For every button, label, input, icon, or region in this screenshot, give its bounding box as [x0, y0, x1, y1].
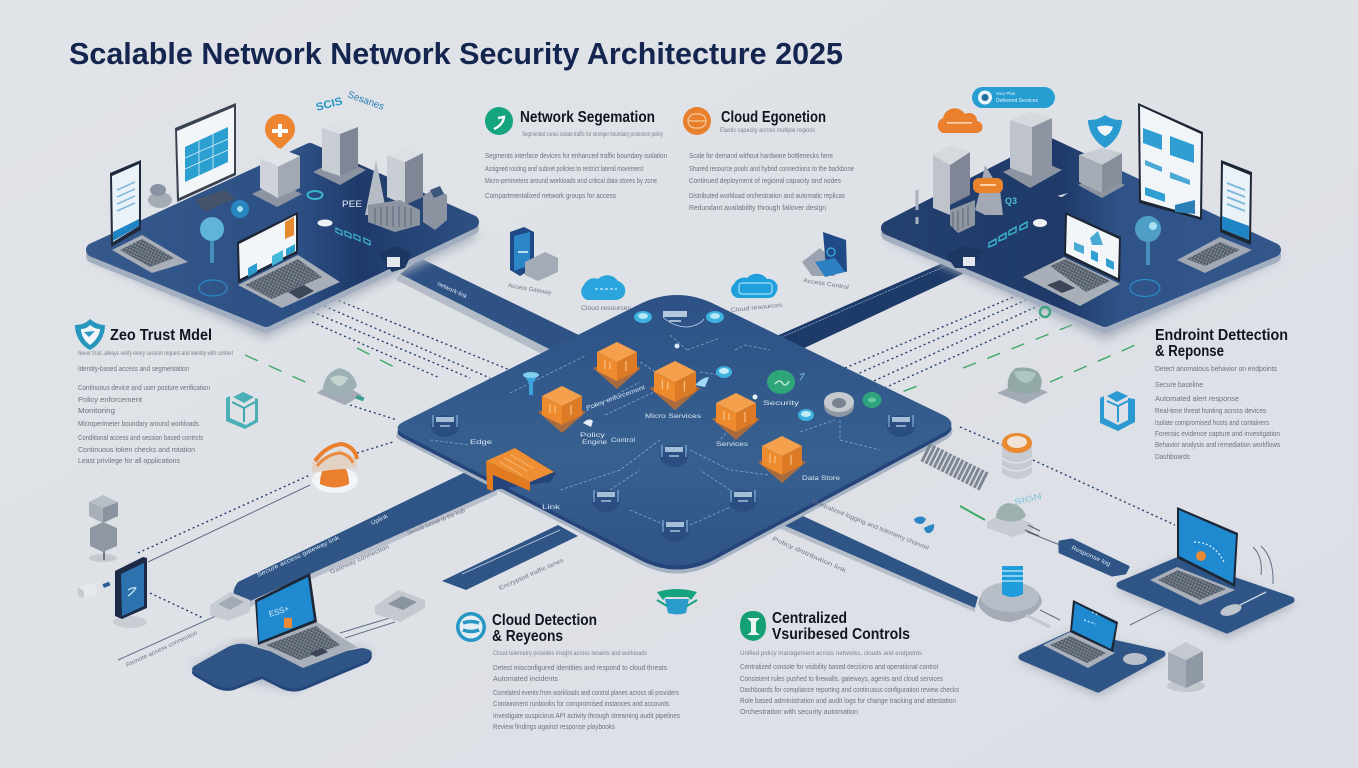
icon: dome device upper right — [997, 368, 1048, 404]
icon: grey cube server — [1167, 642, 1205, 692]
body: Dashboards — [1155, 452, 1190, 461]
laptop — [1150, 507, 1238, 605]
icon: orange shield house — [312, 444, 358, 493]
body: Redundant availability through failover design — [689, 203, 826, 212]
icon: green and blue tray — [657, 589, 697, 614]
icon: glowing drop — [1130, 216, 1161, 296]
body: Assigned routing and subnet policies to restrict lateral movement — [485, 164, 644, 173]
icon: orange cube 2 — [650, 361, 700, 410]
icon: small box — [78, 582, 110, 598]
connector hub — [945, 246, 985, 268]
panel: top-left platform — [90, 89, 480, 338]
labels: small node captions: Control — [611, 438, 635, 444]
icon: device right of centre: Access Control — [803, 278, 849, 291]
label text on connector bars: Uplink — [370, 513, 390, 527]
network links — [430, 317, 880, 525]
body: Shared resource pools and hybrid connections to the backbone — [689, 164, 854, 173]
icon: orange cylinder stack — [1002, 433, 1032, 479]
body: Forensic evidence capture and investigation — [1155, 429, 1280, 438]
icon: dome device lower right: SIGN — [1013, 491, 1043, 507]
body: Secure baseline — [1155, 380, 1203, 389]
body: Investigate suspicious API activity through streaming audit pipelines — [493, 711, 680, 720]
body: Dashboards for compliance reporting and continuous configuration review checks — [740, 685, 959, 694]
body: Unified policy management across networks, clouds and endpoints — [740, 650, 923, 657]
cloud badge — [938, 108, 983, 133]
body: Isolate compromised hosts and containers — [1155, 418, 1269, 427]
label: SCIS Sesanes: Sesanes — [346, 89, 385, 113]
body: Scale for demand without hardware bottlenecks here — [689, 151, 833, 160]
icon: orange cube 4 — [712, 393, 760, 440]
body: Role based administration and audit logs for change tracking and attestation — [740, 696, 956, 705]
body — [689, 127, 854, 212]
monitor — [175, 103, 236, 212]
icon: teal ring — [1040, 307, 1050, 317]
text block: centralized controls — [740, 610, 959, 716]
body: Conditional access and session based controls — [78, 433, 203, 442]
icon: wireless arcs — [1253, 546, 1273, 584]
icons: cyan nodes — [523, 311, 814, 427]
heading: Zeo Trust Mdel — [110, 327, 212, 344]
icon: shield — [75, 319, 105, 350]
icon: cloud right — [731, 274, 783, 314]
label: lower-right caption: Centralized logging and telemetry channel — [811, 499, 929, 552]
icon: pin — [265, 114, 295, 150]
icon: green rounded badge — [740, 611, 766, 641]
body: Containment runbooks for compromised instances and accounts — [493, 699, 669, 708]
tablet — [1138, 103, 1203, 220]
heading: Centralized — [772, 610, 847, 627]
server: middle — [313, 120, 366, 185]
body: Real-time threat hunting across devices — [1155, 406, 1266, 415]
label: lower-right caption 2: Policy distribution link — [771, 536, 848, 575]
heading line 2: & Reponse — [1155, 343, 1224, 360]
heading line 2: Vsuribesed Controls — [772, 626, 910, 643]
body: Correlated events from workloads and control planes across all providers — [493, 688, 679, 697]
icon: blue logo mark — [914, 516, 934, 533]
label: SCIS Sesanes: SCIS — [315, 95, 344, 114]
icon: gateway device lower — [375, 590, 425, 622]
body: Never trust, always verify every session request and identity with context — [78, 350, 233, 357]
icon: cloud left — [581, 275, 631, 312]
icon: device left of centre: Access Gateway — [508, 283, 552, 297]
icon: shield on building — [1078, 115, 1125, 198]
body — [78, 350, 233, 465]
heading: Cloud Egonetion — [721, 109, 826, 126]
icon: device right of centre — [802, 232, 849, 291]
labels: small node captions: Policy enforcement — [586, 385, 646, 412]
body: Compartmentalized network groups for access — [485, 191, 616, 200]
icons: status glyphs — [989, 193, 1068, 247]
icon: orange cube 3 — [538, 386, 586, 433]
icon: mouse — [1123, 653, 1147, 665]
labels: small node captions: Edge — [470, 440, 493, 446]
label: lower-centre caption: Encrypted traffic lanes — [498, 558, 565, 592]
server: tall back — [1003, 112, 1062, 188]
icon: rock ornament — [148, 184, 172, 208]
pill: lower-right label bar: Response log — [1070, 545, 1111, 568]
panel: central hub platform — [396, 295, 952, 574]
labels: small node captions: Security — [763, 401, 799, 407]
body: Segmented zones isolate traffic for stronger boundary protection policy — [522, 131, 664, 138]
icon: green circle — [485, 107, 513, 135]
icon: blue cube outline — [1100, 391, 1135, 431]
label text on connector bars — [256, 281, 469, 579]
labels: small node captions: Services — [716, 442, 748, 448]
icon: round device with blue stack — [978, 566, 1050, 627]
body — [485, 131, 667, 200]
labels: small node captions: Engine — [582, 440, 608, 446]
icon: cloud left: Cloud resources — [581, 306, 631, 312]
body: Micro-perimeters around workloads and critical data stores by zone — [485, 176, 657, 185]
body: Distributed workload orchestration and automatic replicas — [689, 191, 845, 200]
pill label — [972, 87, 1055, 108]
panel: lower-left laptop station — [190, 573, 375, 692]
body: Least privilege for all applications — [78, 456, 180, 465]
icon: cloud right: Cloud resources — [731, 303, 783, 314]
body: Continuous token checks and rotation — [78, 445, 195, 454]
body: Review findings against response playbooks — [493, 722, 615, 731]
text block: zero trust model — [75, 319, 233, 465]
connector bars — [234, 258, 978, 612]
icon: mouse — [1219, 592, 1266, 618]
label: lower-left bar caption: Gateway connection — [329, 544, 390, 576]
body: Continuous device and user posture verification — [78, 383, 210, 392]
body: Consistent rules pushed to firewalls, gateways, agents and cloud services — [740, 674, 943, 683]
labels: small node captions: Policy — [580, 433, 605, 439]
body: Automated incidents — [493, 674, 558, 683]
server: left — [252, 148, 302, 207]
text block: cloud detection — [456, 612, 680, 731]
icon: router — [210, 592, 250, 621]
body: Policy enforcement — [78, 395, 143, 404]
laptop: left — [110, 160, 188, 273]
pill label: Delivered Services — [996, 98, 1038, 104]
laptop: ESS+ — [268, 604, 291, 619]
icon: phone on stand — [113, 557, 147, 628]
icon: dome device lower right — [987, 491, 1043, 537]
label: PEE: PEE — [342, 199, 362, 209]
labels: bracket nodes — [431, 311, 915, 542]
body: Orchestration with security automation — [740, 707, 858, 716]
body: Microperimeter boundary around workloads — [78, 419, 199, 428]
connector hub — [378, 246, 412, 272]
icon: glowing bubble — [199, 200, 249, 296]
orange gateway slab — [486, 448, 556, 491]
body — [1155, 364, 1280, 461]
pill: lower-right label bar — [1060, 540, 1128, 575]
laptop: centre — [1023, 212, 1121, 306]
laptop — [255, 573, 357, 668]
labels: small node captions — [470, 385, 841, 511]
panel: lower-right laptop station 2 — [1018, 600, 1167, 696]
server: right — [365, 147, 447, 232]
body — [493, 650, 680, 731]
text block: cloud expansion — [683, 107, 854, 212]
body: Cloud telemetry provides insight across tenants and workloads — [493, 650, 648, 657]
icon: dome device left — [317, 368, 364, 405]
icon: orange circle — [683, 107, 711, 135]
label text on connector bars: network-link — [436, 281, 469, 301]
body: Monitoring — [78, 406, 115, 415]
body: Centralized console for visibility based decisions and operational control — [740, 662, 938, 671]
labels: small node captions: Link — [542, 505, 562, 511]
icon: device left of centre — [508, 227, 558, 297]
title: Scalable Network Network Security Architecture 2025 — [69, 36, 843, 71]
laptop: centre — [237, 212, 340, 308]
laptop — [1043, 600, 1118, 668]
server: front cluster — [917, 145, 1003, 233]
body: Detect anomalous behavior on endpoints — [1155, 364, 1277, 373]
body: Behavior analysis and remediation workflows — [1155, 440, 1280, 449]
body: Segments interface devices for enhanced traffic boundary isolation — [485, 151, 667, 160]
labels: small node captions: Data Store — [802, 476, 841, 482]
body — [740, 650, 959, 716]
text block: network segmentation — [485, 107, 667, 200]
icon: teal circle — [456, 612, 486, 642]
panel: lower-right laptop station 1 — [1115, 507, 1297, 638]
labels: small node captions: Micro Services — [645, 414, 701, 420]
body: Identity-based access and segmentation — [78, 364, 189, 373]
icon: orange cube 1 — [593, 342, 641, 389]
icon: small server stack — [89, 495, 118, 562]
label text on connector bars: Secure access gateway link — [256, 535, 342, 579]
icon: coil cable — [925, 452, 985, 482]
body: Elastic capacity across multiple regions — [720, 127, 816, 134]
icons: green and grey nodes — [767, 370, 882, 417]
heading: Cloud Detection — [492, 612, 597, 629]
heading line 2: & Reyeons — [492, 628, 563, 645]
label: dotted link caption: Remote access connection — [125, 630, 199, 669]
icon: orange cube 5 — [758, 436, 806, 483]
panel: top-right platform — [885, 87, 1282, 340]
icon: teal cube outline — [226, 392, 258, 429]
body: Continued deployment of regional capacity and nodes — [689, 176, 841, 185]
label: Q3: Q3 — [1005, 196, 1017, 206]
dotted data lines — [118, 290, 1175, 660]
body: Detect misconfigured identities and respond to cloud threats — [493, 663, 667, 672]
label: lower-left centre caption: Secure tunnel to the hub — [407, 508, 467, 537]
laptop: phone screen right — [1177, 160, 1252, 273]
pill label: Your Plan — [996, 91, 1016, 96]
heading: Endroint Dettection — [1155, 327, 1288, 344]
heading: Network Segemation — [520, 109, 655, 126]
body: Automated alert response — [1155, 394, 1239, 403]
icons: status glyphs — [308, 191, 370, 245]
text block: endpoint detection — [1155, 327, 1288, 461]
label: SCIS Sesanes — [315, 89, 385, 114]
